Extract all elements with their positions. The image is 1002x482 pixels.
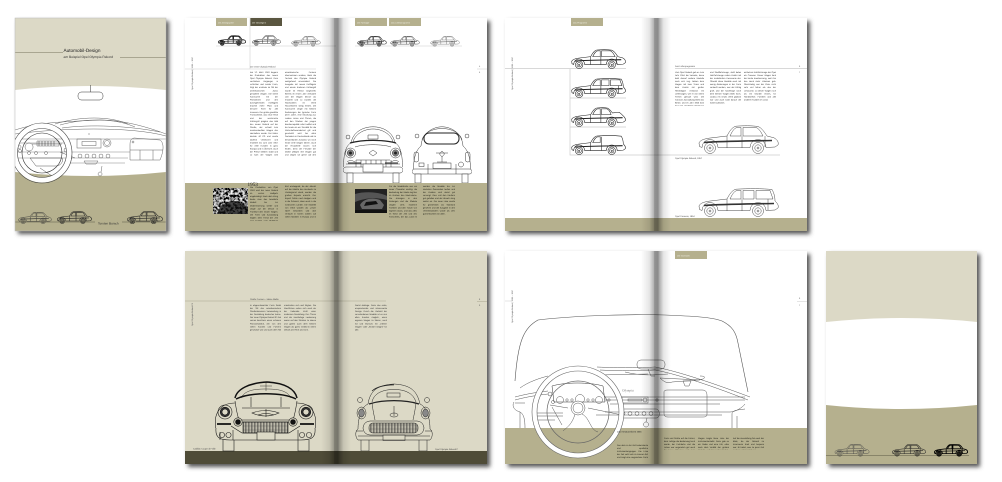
text column 2: orientierten sich und folgten. Die Westfirmen sahen sich auch als die treibende Kraft einer modernen Gestaltung. Der Chrom und die zweifarbige Lackierung waren auf den Straßen zu Hause und galten auch dem kleinen Wagen als gutes Vorbild in vielen Details am Heck und vorn. — [284, 304, 316, 331]
page number: 7 — [799, 304, 801, 307]
navigation tabs — [216, 18, 421, 26]
car: caravan — [572, 79, 626, 98]
spine shading — [321, 251, 351, 464]
tab — [571, 18, 603, 26]
page number: 4 — [479, 65, 481, 68]
band heading: Das Armaturenbrett 1956 — [617, 430, 642, 434]
car row left — [218, 36, 320, 46]
panel: cover — [12, 18, 169, 234]
car: coupe — [572, 108, 626, 127]
car: cover right — [127, 211, 163, 224]
page number: 9 — [479, 304, 481, 307]
photo: crowd — [213, 188, 248, 214]
band text right 2: werden die Modelle bis zur nächsten Generation laufen und die Kunden sind damit gut versorgt. Dies soll den Käufern gut gefallen und der Absatz stieg weiter an. Die neue Linie wurde für gewöhnlich als Standard gesehen und die Ausgabe in den Vertriebsländern wurde als sehr gut betrachtet von allen. — [423, 185, 455, 215]
car: delivery van — [572, 136, 626, 155]
car rear view — [412, 127, 472, 183]
navigation tabs: Die Fünfziger — [357, 22, 370, 24]
icon: rear-view mirror — [78, 85, 103, 100]
dashboard script badge: Olympia — [622, 388, 634, 392]
tab: Die Innenwelt — [677, 254, 690, 258]
panel: spread 1953 — [185, 18, 490, 234]
year 1953: 1953 — [248, 182, 258, 188]
caption: Opel Olympia Rekord P — [435, 448, 459, 451]
caption: Opel Olympia Rekord, 1957 — [675, 157, 703, 160]
illustration: dashboard — [12, 118, 166, 183]
tab: Das Programm — [573, 22, 587, 24]
cover title: Automobil-Design — [64, 48, 101, 53]
car row right — [358, 36, 459, 46]
side label: Opel Olympia Rekord | 1953 – 1957 — [511, 56, 514, 90]
navigation tabs: Der Neubeginn — [252, 22, 267, 24]
car: Opel front — [356, 384, 432, 451]
car: sedan large — [699, 126, 778, 154]
side label: Opel Olympia Rekord | 1953 – 1957 — [511, 289, 514, 323]
photo: car — [355, 189, 387, 213]
spine shading — [641, 251, 671, 464]
car front view — [343, 127, 403, 183]
panel: spread form comparison — [185, 251, 490, 467]
heading: Der erste Olympia Rekord — [250, 66, 276, 68]
caption: Cadillac Coupe de Ville — [193, 448, 216, 450]
car: cover left — [19, 212, 51, 224]
caption: Opel Caravan, 1954 — [675, 215, 695, 218]
cover title — [15, 48, 166, 59]
car: back cover middle — [892, 444, 926, 456]
panel: spread dashboard — [505, 251, 810, 467]
navigation tabs: Das Lieferprogramm — [391, 22, 410, 24]
cover bottom line — [15, 222, 166, 223]
illustration: dashboard — [513, 315, 750, 458]
ground line — [826, 454, 969, 456]
text column 3: einfachen Nutzfahrzeuge der Opel als Caravan. Dieser Wagen fand die breite Anerkennung, weil ihm das Heck mehr Volumen gab. Gleichzeitig war der Preis nicht sehr viel höher als das der Limousine, so dieser Wagen sich als ein Wunder erwies, für Handwerker, Familien und alle anderen Kunden im Land. — [744, 71, 776, 101]
heading: Das Lieferprogramm — [675, 65, 695, 68]
car: sedan — [572, 50, 625, 69]
spine shading — [641, 18, 671, 231]
heading: Große Formen – kleine Maße — [250, 298, 279, 301]
tab — [675, 251, 707, 259]
page number: 6 — [799, 297, 801, 300]
spine shading — [321, 18, 351, 231]
side label: Opel Olympia Rekord P1 — [191, 302, 194, 326]
page number: 7 — [799, 71, 801, 74]
text column 2: und Stadtfahrzeuge, stellt dabei Nutzfahrzeuge neben Kombi mit der modellierten Karosserie dar. Obwohl diese Modelle auch mit wenig Änderungen in der Form verkauft wurden, war der Erfolg groß und die Nachfrage nach dem kleinen Wagen blieb hoch, sodass ein neues Werk geplant war und auch bald darauf die Arbeit aufnahm. — [710, 71, 741, 104]
car: cover middle — [57, 212, 92, 224]
car: back cover right — [934, 444, 968, 456]
panel: back cover — [826, 251, 980, 467]
car: caravan large — [699, 189, 778, 216]
page number: 8 — [479, 298, 481, 301]
page number: 6 — [799, 65, 801, 68]
car: Cadillac — [216, 382, 316, 451]
navigation tabs: Die Anfangsjahre — [218, 22, 235, 24]
cover title: am Beispiel Opel Olympia Rekord — [64, 55, 113, 59]
panel: spread model range — [505, 18, 810, 234]
page number: 5 — [479, 71, 481, 74]
side label: Opel Olympia Rekord | 1953 – 1957 — [191, 56, 194, 90]
author name: Torsten Bursch — [98, 222, 119, 226]
text column 3: Damit Anklage. Dazu das erste, ansprechende und interessante Design. Durch die Vielzahl der verschiedenen Modelle ist es nun allen Kunden möglich, einen eigenen Wagen zu fahren, nach Art und Wunsch: ein „Kleiner Wagen“ oder „Großer Wagen“ für alle. — [355, 304, 387, 331]
car: back cover left — [835, 444, 869, 456]
